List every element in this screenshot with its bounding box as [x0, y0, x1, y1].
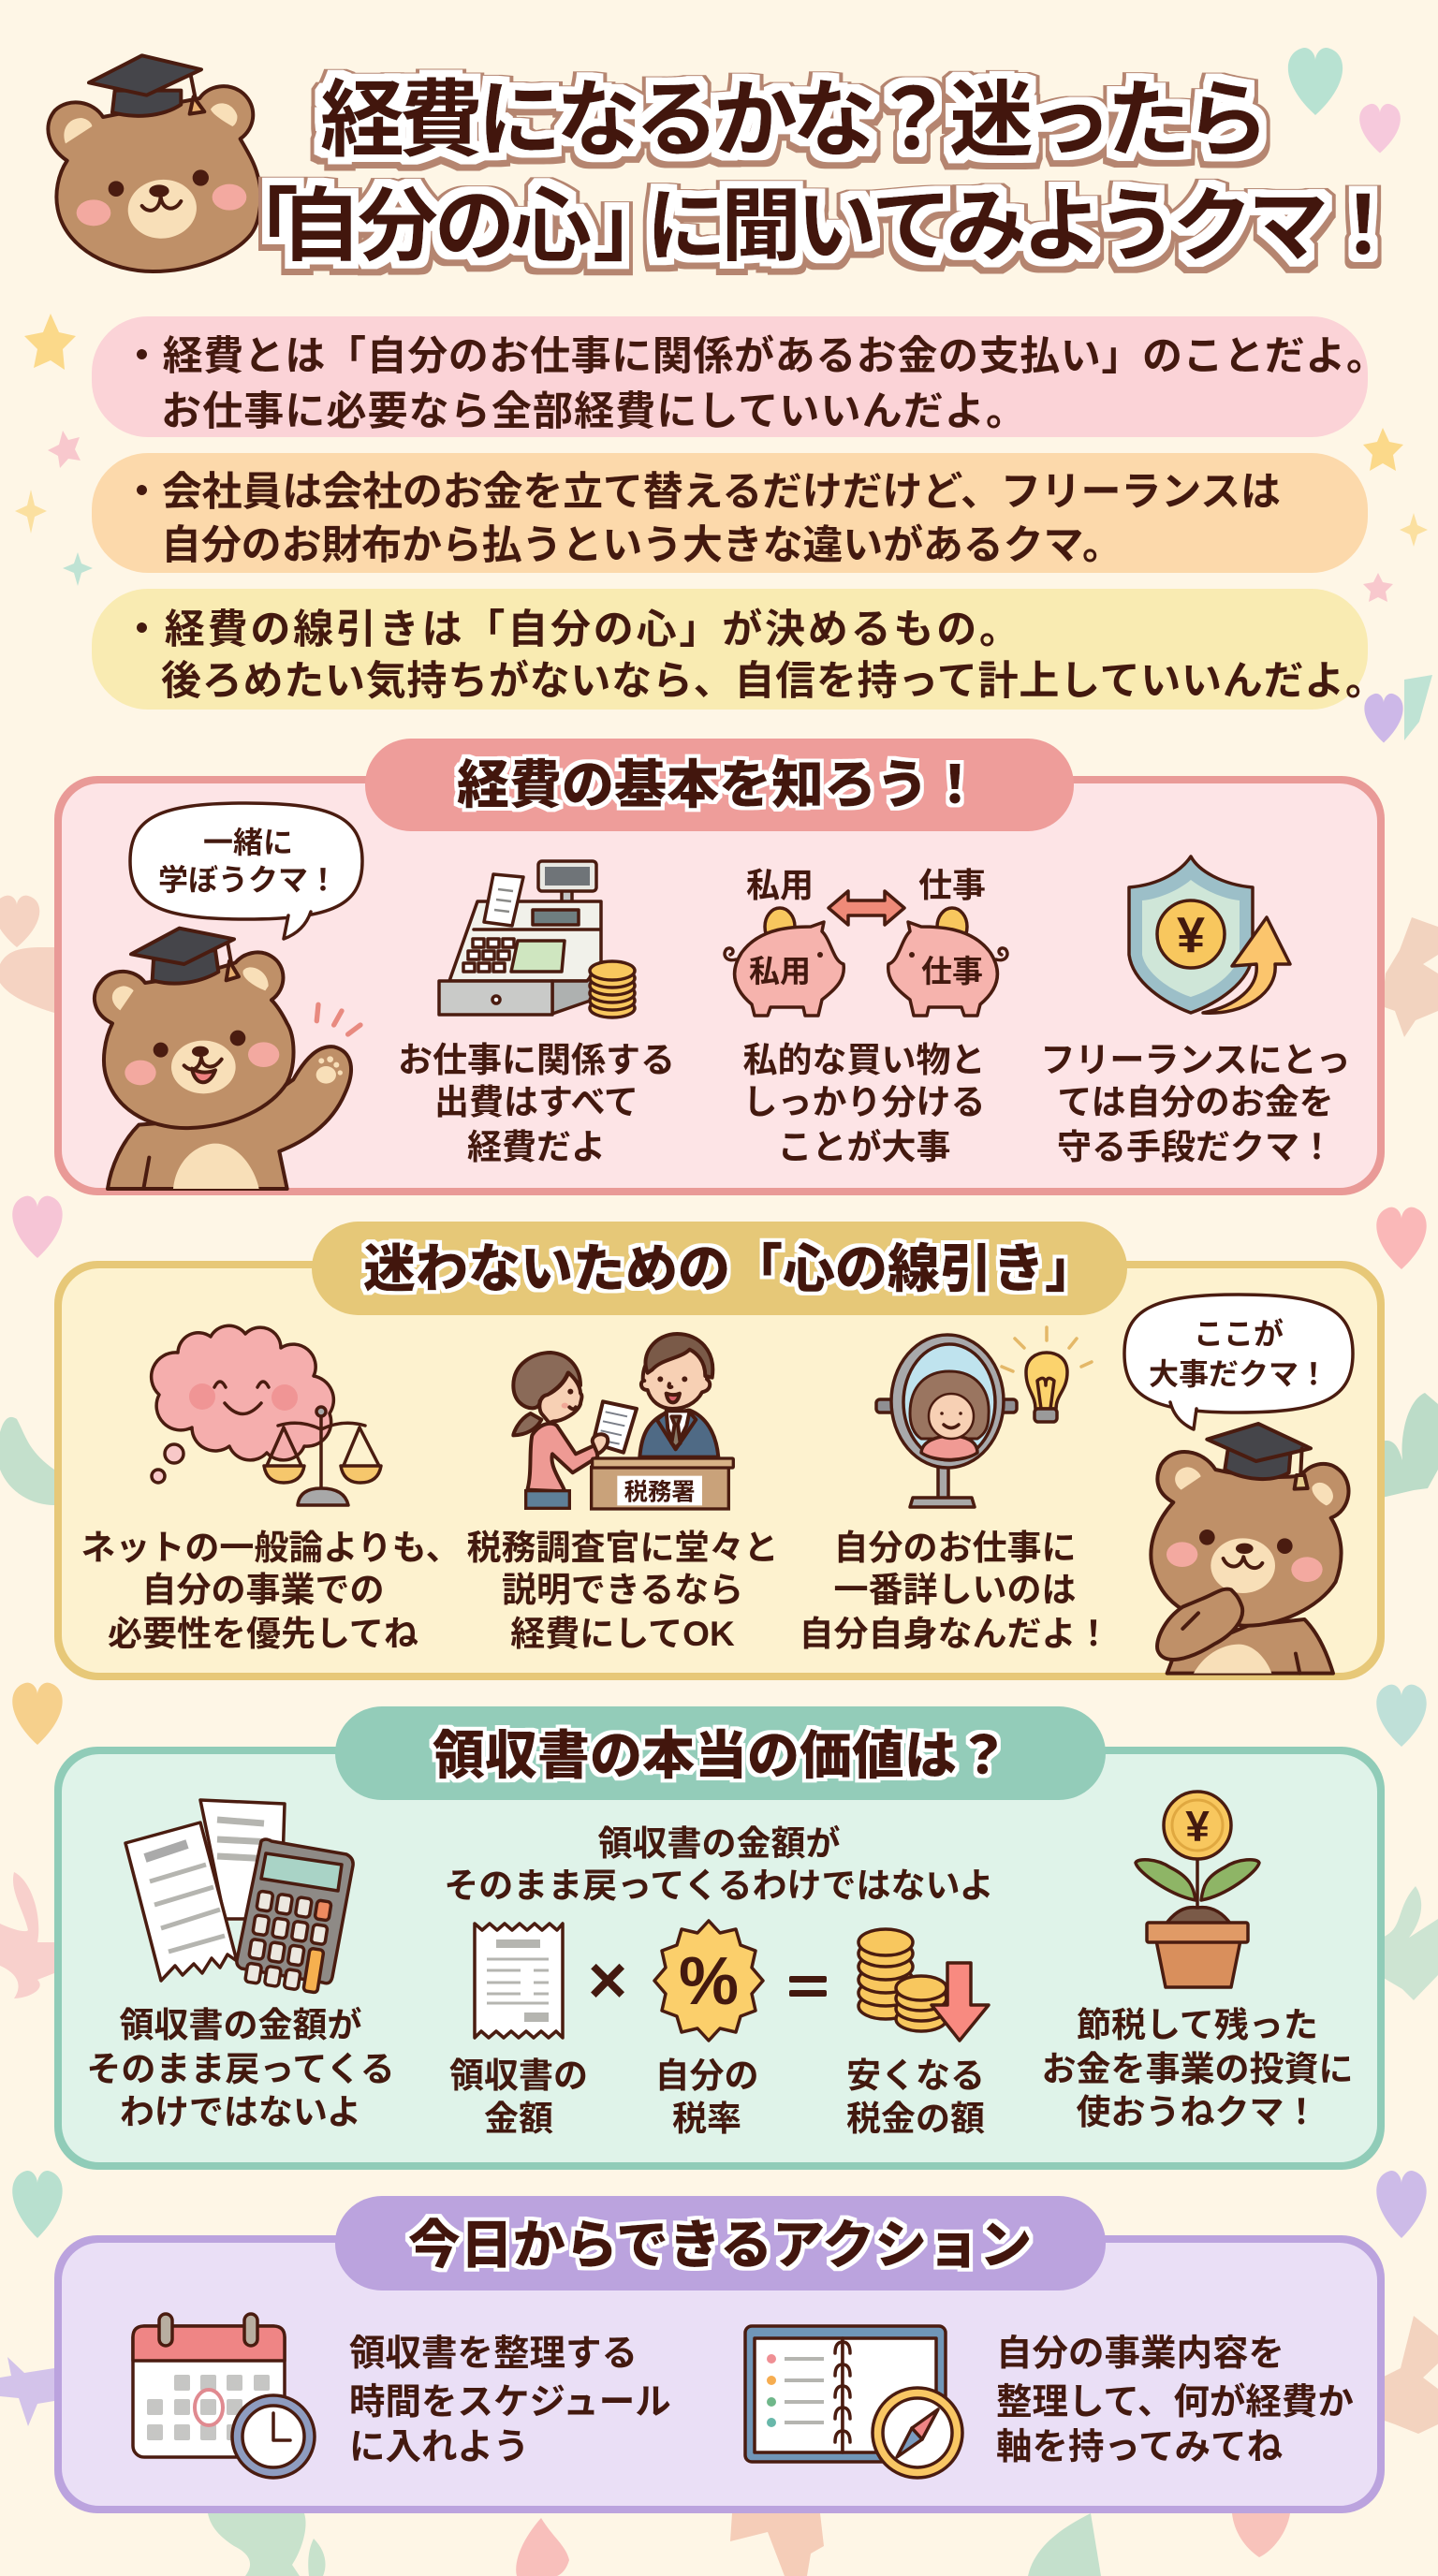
- summary pill: pink: お仕事に必要なら全部経費にしていいんだよ。: [161, 389, 1026, 434]
- icon: receipts and calculator: [125, 1800, 353, 1993]
- speech bubble: learn together: 一緒に: [203, 826, 293, 859]
- text: you know your job best: 自分のお仕事に: [833, 1529, 1077, 1567]
- text: schedule receipts: [349, 2334, 671, 2467]
- label: tax saved: [846, 2056, 985, 2138]
- text: you know your job best: 一番詳しいのは: [833, 1571, 1077, 1609]
- icon: percent badge: [654, 1921, 763, 2041]
- text: protect your money: [1040, 1041, 1351, 1166]
- icon: calendar and clock: [133, 2314, 315, 2478]
- title: 経費になるかな？迷ったら: [320, 74, 1269, 168]
- text: organize business: 軸を持ってみてね: [996, 2427, 1283, 2467]
- summary pill: yellow: [92, 589, 1386, 710]
- heading: expense basics: 経費の基本を知ろう！: [457, 755, 981, 814]
- summary pill: orange: 自分のお財布から払うという大きな違いがあるクマ。: [161, 523, 1123, 568]
- heading: actions today: [335, 2196, 1106, 2291]
- text: prioritize own business: [81, 1529, 461, 1653]
- heading: inner line: [312, 1222, 1127, 1315]
- text: amount not refunded: [86, 2006, 395, 2131]
- text: invest savings: お金を事業の投資に: [1041, 2050, 1354, 2088]
- icon: notebook and compass: [745, 2326, 962, 2478]
- summary pill: pink: [92, 316, 1387, 437]
- icon: coin plant in pot: [1136, 1792, 1259, 1987]
- text: separate private spending: ことが大事: [777, 1128, 951, 1166]
- summary pill: orange: [92, 453, 1368, 573]
- text: invest savings: [1041, 2006, 1354, 2131]
- icon: double arrow: [829, 891, 904, 925]
- text: invest savings: 使おうねクマ！: [1077, 2093, 1318, 2131]
- text: prioritize own business: 自分の事業での: [142, 1571, 384, 1609]
- text: schedule receipts: 時間をスケジュール: [349, 2382, 671, 2422]
- label: private use: 私用: [746, 866, 814, 904]
- icon: piggy bank left: [725, 908, 844, 1016]
- text: prioritize own business: 必要性を優先してね: [108, 1615, 418, 1653]
- speech bubble: this is important: 大事だクマ！: [1149, 1357, 1328, 1391]
- text: amount not refunded: 領収書の金額が: [120, 2006, 361, 2044]
- panel: actions today: [54, 2196, 1385, 2513]
- symbol: equals: [789, 1976, 827, 1997]
- icon: smiling brain and scale: [152, 1325, 381, 1505]
- text: separate private spending: 私的な買い物と: [743, 1041, 985, 1079]
- text: you know your job best: 自分自身なんだよ！: [800, 1615, 1110, 1653]
- panel: receipt value: [54, 1706, 1385, 2170]
- title: 「自分の心」に聞いてみようクマ！: [218, 182, 1403, 271]
- heading: receipt value: [335, 1706, 1106, 1800]
- icon: shield with yen and arrow: [1129, 856, 1290, 1013]
- label: tax saved: 税金の額: [846, 2100, 985, 2138]
- text: protect your money: ては自分のお金を: [1057, 1083, 1334, 1121]
- text: explain to tax inspector: 税務調査官に堂々と: [466, 1529, 779, 1567]
- summary pill: yellow: ・経費の線引きは「自分の心」が決めるもの。: [122, 607, 1020, 652]
- text: amount not refunded: わけではないよ: [120, 2093, 361, 2131]
- heading: receipt value: 領収書の本当の価値は？: [433, 1726, 1009, 1785]
- icon: coin plant in pot: ¥: [1185, 1802, 1210, 1851]
- text: protect your money: 守る手段だクマ！: [1057, 1128, 1334, 1166]
- label: receipt amount: 金額: [484, 2100, 553, 2138]
- label: tax rate: 税率: [672, 2100, 741, 2138]
- bear waving: [95, 929, 360, 1189]
- text: explain to tax inspector: 経費にしてOK: [510, 1615, 735, 1653]
- mascot: bear head with graduation cap: [48, 55, 260, 271]
- heading: actions today: 今日からできるアクション: [408, 2216, 1032, 2275]
- text: you know your job best: [800, 1529, 1110, 1653]
- icon: shield with yen and arrow: ¥: [1177, 907, 1205, 963]
- icon: mirror and lightbulb: [876, 1327, 1092, 1507]
- panel: inner line: [54, 1222, 1385, 1680]
- label: tax saved: 安くなる: [846, 2056, 985, 2095]
- icon: piggy bank left: 私用: [749, 954, 811, 988]
- text: organize business: [996, 2334, 1354, 2467]
- label: tax rate: 自分の: [655, 2056, 758, 2095]
- summary pill: orange: ・会社員は会社のお金を立て替えるだけだけど、フリーランスは: [122, 470, 1281, 515]
- text: organize business: 整理して、何が経費か: [996, 2382, 1354, 2422]
- icon: percent badge: %: [679, 1944, 739, 2019]
- text: schedule receipts: に入れよう: [349, 2427, 530, 2467]
- summary pill: pink: ・経費とは「自分のお仕事に関係があるお金の支払い」のことだよ。: [122, 334, 1387, 379]
- text: separate private spending: しっかり分ける: [743, 1083, 985, 1121]
- text: center note: [444, 1824, 994, 1905]
- text: work expenses: 出費はすべて: [434, 1083, 638, 1121]
- icon: cash register: [439, 861, 635, 1017]
- text: work expenses: 経費だよ: [467, 1128, 606, 1166]
- panel: expense basics: [54, 739, 1385, 1195]
- text: protect your money: フリーランスにとっ: [1040, 1041, 1351, 1079]
- heading: expense basics: [365, 739, 1074, 831]
- icon: piggy bank right: 仕事: [921, 954, 983, 988]
- title: [218, 74, 1403, 271]
- symbol: multiply: ×: [588, 1943, 627, 2018]
- text: organize business: 自分の事業内容を: [996, 2334, 1284, 2374]
- speech bubble: this is important: ここが: [1194, 1317, 1284, 1351]
- summary pill: yellow: 後ろめたい気持ちがないなら、自信を持って計上していいんだよ。: [161, 659, 1386, 704]
- text: work expenses: [398, 1041, 675, 1166]
- label: receipt amount: [449, 2056, 588, 2138]
- icon: coins with down arrow: [858, 1929, 989, 2041]
- text: center note: そのまま戻ってくるわけではないよ: [444, 1866, 994, 1905]
- icon: tax office consultation: 税務署: [624, 1480, 696, 1506]
- icon: tax office consultation: [513, 1334, 733, 1509]
- speech bubble: learn together: 学ぼうクマ！: [158, 863, 338, 897]
- text: separate private spending: [743, 1041, 985, 1166]
- label: receipt amount: 領収書の: [449, 2056, 588, 2095]
- icon: piggy bank right: [888, 908, 1007, 1016]
- text: invest savings: 節税して残った: [1077, 2006, 1318, 2044]
- bear thinking: [1151, 1424, 1349, 1674]
- label: tax rate: [655, 2056, 758, 2138]
- speech bubble: learn together: [130, 803, 362, 939]
- icon: receipt: [475, 1924, 563, 2038]
- text: center note: 領収書の金額が: [597, 1824, 841, 1863]
- text: prioritize own business: ネットの一般論よりも、: [81, 1529, 461, 1567]
- text: explain to tax inspector: 説明できるなら: [502, 1571, 743, 1609]
- text: explain to tax inspector: [466, 1529, 779, 1653]
- text: work expenses: お仕事に関係する: [398, 1041, 675, 1079]
- heading: inner line: 迷わないための「心の線引き」: [363, 1239, 1097, 1298]
- speech bubble: this is important: [1124, 1295, 1353, 1429]
- label: work: 仕事: [918, 866, 986, 904]
- text: schedule receipts: 領収書を整理する: [349, 2334, 638, 2374]
- text: amount not refunded: そのまま戻ってくる: [86, 2050, 395, 2088]
